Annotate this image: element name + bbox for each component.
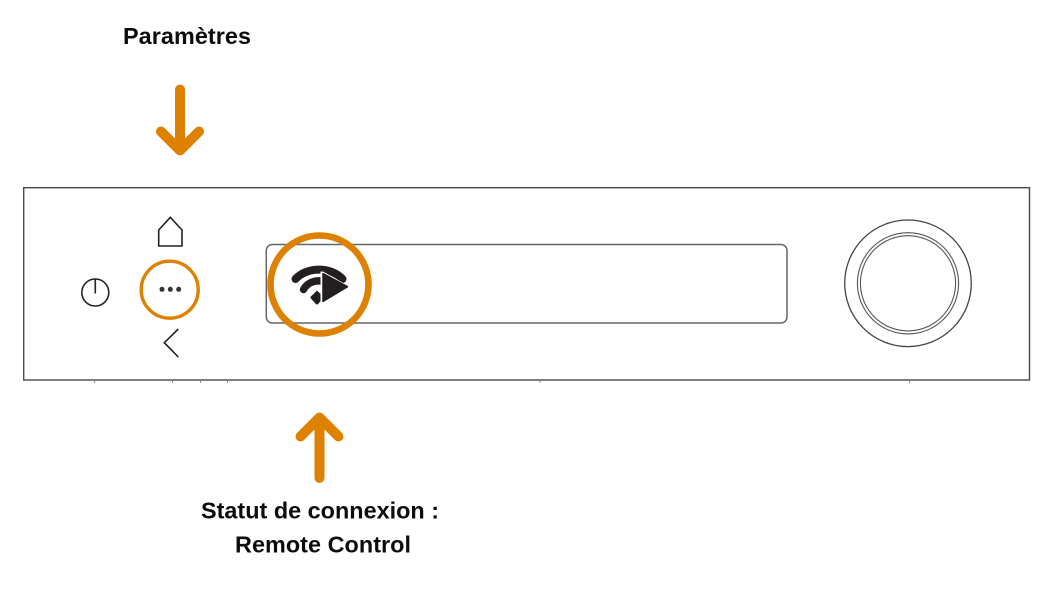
display screen <box>266 244 787 323</box>
icon: power button <box>82 279 109 306</box>
label: Paramètres: Paramètres <box>123 23 251 49</box>
highlight circle: connection status <box>270 236 368 334</box>
arrow: down to settings <box>161 90 199 150</box>
icon: home button <box>159 217 182 246</box>
icon: settings dots <box>160 287 181 292</box>
arrow: up to connection status <box>300 418 338 478</box>
icon: rotary volume knob <box>845 220 971 347</box>
label: connection status <box>201 498 439 558</box>
icon: wifi play status <box>296 270 350 304</box>
label: connection status: Remote Control <box>235 532 411 558</box>
icon: back chevron <box>164 329 178 357</box>
highlight circle: settings button <box>141 261 198 318</box>
label: connection status: Statut de connexion : <box>201 498 439 524</box>
device front panel <box>24 188 1029 383</box>
